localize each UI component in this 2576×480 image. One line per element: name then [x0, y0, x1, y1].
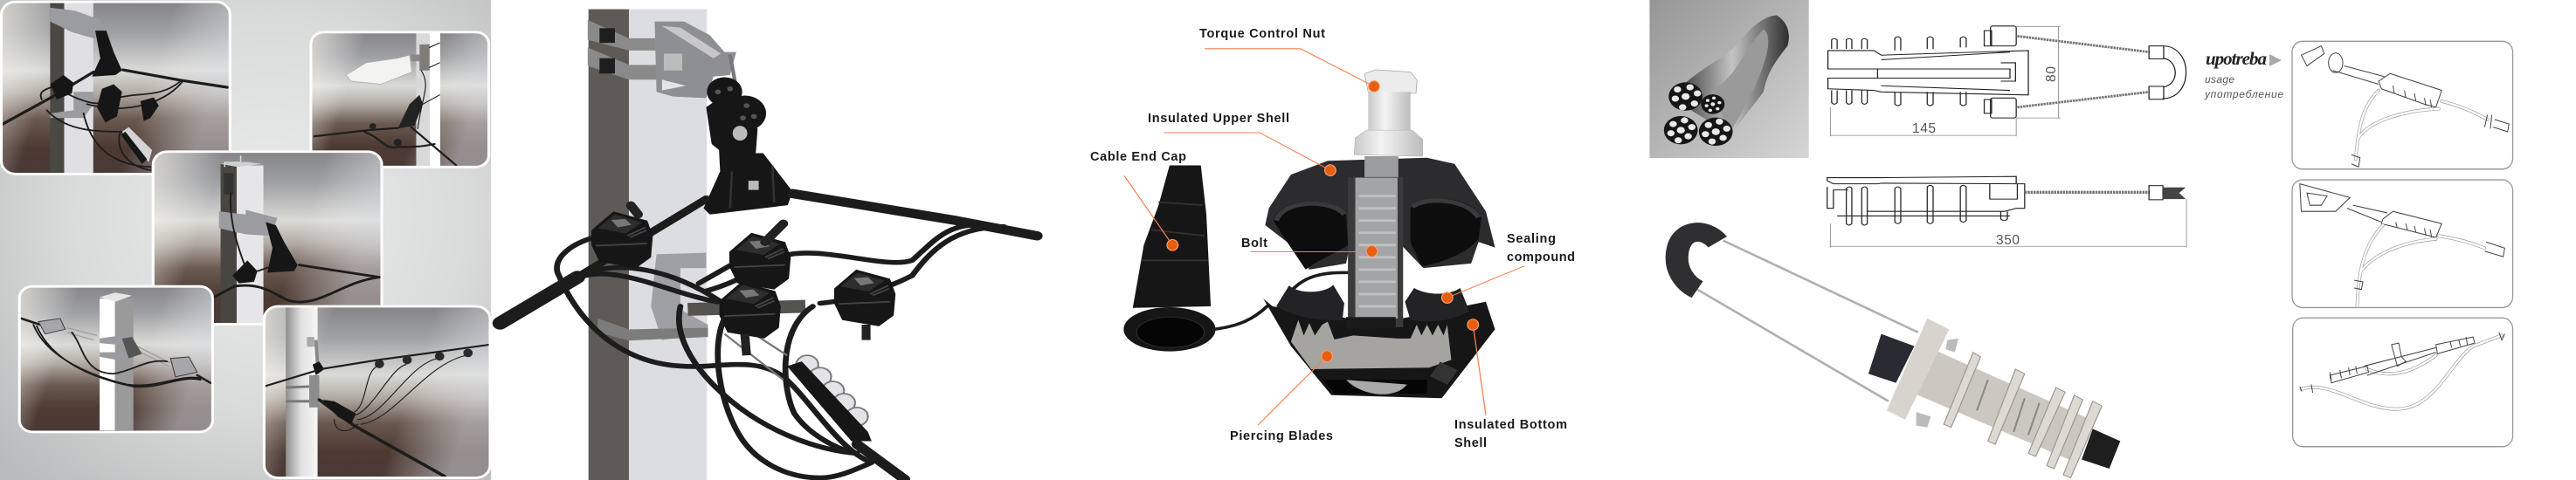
part: cable end cap	[1123, 166, 1267, 352]
dimension: 145: 145	[1912, 121, 1936, 136]
drawing: clamp side view	[1827, 176, 2186, 248]
icon: branch connector four	[834, 270, 895, 326]
photo: pole with street lamp	[311, 32, 489, 167]
illustration: large concrete pole with cable assembly	[501, 10, 1037, 480]
part: torque control nut	[1354, 70, 1423, 156]
part: bolt	[1346, 156, 1403, 329]
label: insulated bottom shell: Insulated Bottom	[1454, 418, 1567, 432]
icon: branch connector two	[729, 233, 791, 290]
label: cable end cap: Cable End Cap	[1090, 150, 1186, 164]
photo: pole with anchor clamp and bent service cable	[153, 152, 382, 324]
text: upotreba: upotreba	[2206, 48, 2267, 69]
image: four-core twisted cable cross-section	[1649, 0, 1809, 158]
label: piercing blades: Piercing Blades	[1230, 429, 1333, 443]
heading: usage	[2204, 48, 2283, 100]
text: usage: usage	[2205, 73, 2234, 86]
label: bolt: Bolt	[1241, 237, 1267, 250]
drawing: clamp top view	[1828, 26, 2186, 136]
diagram: piercing connector parts	[1123, 49, 1524, 425]
photo: pole with suspension clamp and branch connectors	[2, 2, 230, 174]
panel: usage sketches	[2292, 41, 2513, 447]
dimension: 350: 350	[1996, 233, 2020, 248]
icon: branch connector three	[720, 282, 781, 339]
label: insulated upper shell: Insulated Upper Shell	[1148, 112, 1289, 126]
photo: round pole with comb branch connectors	[264, 306, 490, 478]
dimension: 80: 80	[2044, 66, 2059, 82]
text: употребление: употребление	[2204, 88, 2283, 100]
part: insulated upper shell	[1265, 158, 1495, 270]
panel: installation photo collage	[0, 0, 491, 480]
sketch: dead-end with bracket ring	[2292, 41, 2513, 169]
sketch: through-span double anchor	[2293, 318, 2513, 447]
label: insulated bottom shell: Shell	[1454, 436, 1487, 450]
leader lines and markers	[1124, 49, 1524, 425]
icon: arrow	[2269, 54, 2282, 66]
label: torque control nut: Torque Control Nut	[1199, 27, 1325, 41]
sketch: dead-end with triangular bracket	[2292, 180, 2513, 307]
photo: anchor clamp with bail wire	[1677, 232, 2120, 478]
icon: branch connector one	[591, 211, 653, 268]
part: lower shell and piercing blades	[1263, 285, 1495, 398]
panel: anchor clamp drawings and photo	[1649, 0, 2186, 478]
photo: through pole with two anchor clamps	[19, 286, 212, 432]
label: sealing compound: compound	[1507, 250, 1575, 264]
label: sealing compound: Sealing	[1507, 232, 1556, 246]
